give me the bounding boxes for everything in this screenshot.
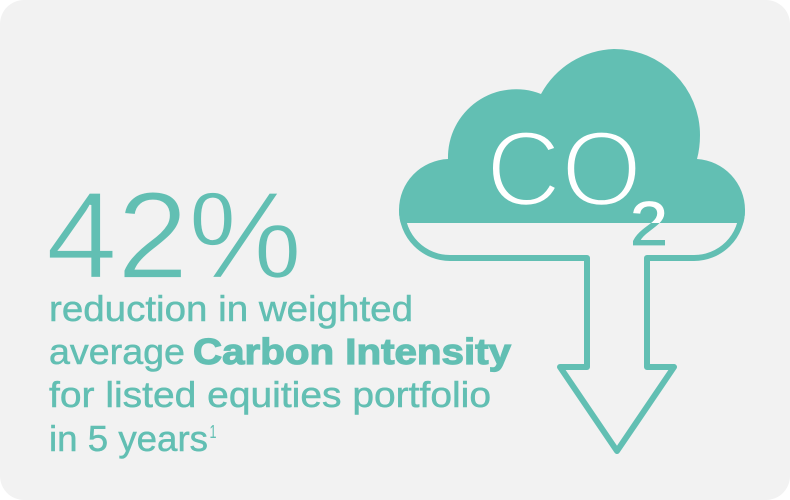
description text: for listed equities portfolio: [49, 374, 491, 415]
description text: 1: [210, 422, 216, 442]
icon: CO2 cloud with downward arrow: [399, 49, 745, 451]
subscript 2: 2: [630, 190, 668, 259]
description text: average: [49, 331, 185, 372]
cloud filled upper part: [399, 49, 745, 223]
description text: in 5 years: [49, 418, 208, 459]
description text: Carbon Intensity: [193, 331, 511, 372]
CO label: CO: [486, 108, 642, 228]
headline figure: 42%: [46, 168, 302, 305]
description text: [49, 288, 511, 459]
description text: reduction in weighted: [49, 288, 413, 329]
arrow outline joined to cloud base: [402, 210, 742, 451]
